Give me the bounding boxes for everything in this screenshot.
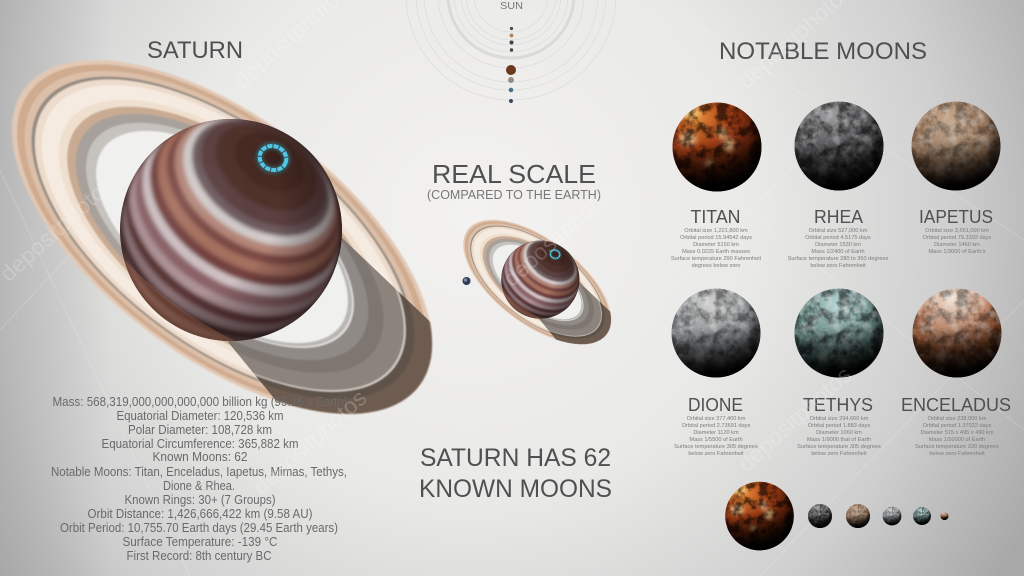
moon: dione: below zero Fahrenheit — [688, 451, 744, 457]
moon: enceladus: below zero Fahrenheit — [929, 451, 985, 457]
moon: dione: Orbital size 377,400 km — [687, 416, 746, 422]
moon: dione: Orbital period 2.73691 days — [682, 423, 751, 429]
heading: real scale — [427, 159, 601, 202]
moon: rhea: Diameter 1530 km — [815, 242, 861, 248]
moon: rhea: Orbital size 527,000 km — [809, 228, 868, 234]
moon: titan: Orbital size 1,221,800 km — [684, 228, 748, 234]
moon: enceladus — [901, 288, 1011, 457]
moon: tethys: below zero Fahrenheit — [811, 451, 867, 457]
moon: tethys: Orbital period 1.883 days — [808, 423, 870, 429]
moon: enceladus: ENCELADUS — [901, 394, 1011, 415]
saturn facts list: Mass: 568,319,000,000,000,000 billion kg (95.16 x Earth) — [52, 395, 348, 409]
moon: enceladus: Diameter 515 x 495 x 490 km — [920, 430, 994, 436]
heading: real scale: (COMPARED TO THE EARTH) — [427, 188, 601, 202]
saturn facts list: Equatorial Diameter: 120,536 km — [116, 409, 284, 423]
moon: titan: TITAN — [690, 206, 740, 227]
stock watermarks — [0, 0, 857, 500]
moon: rhea: Mass 1/2400 of Earth — [811, 249, 865, 255]
solar system orbit diagram — [406, 0, 616, 103]
saturn facts list: Dione & Rhea. — [163, 479, 235, 493]
moon: titan — [671, 102, 762, 269]
moon: iapetus: Diameter 1460 km — [934, 242, 980, 248]
moon: iapetus: IAPETUS — [919, 206, 993, 227]
stock watermarks: depositphotos — [733, 361, 857, 477]
moon: tethys: Surface temperature 305 degrees — [797, 444, 881, 450]
moon: tethys: Mass 1/9000 that of Earth — [807, 437, 871, 443]
saturn facts list: Known Rings: 30+ (7 Groups) — [124, 493, 276, 507]
moon: dione: Surface temperature 305 degrees — [674, 444, 758, 450]
real scale saturn and earth — [442, 196, 632, 368]
moon: iapetus: Orbital period 79.3302 days — [923, 235, 992, 241]
moons size comparison row — [725, 481, 949, 551]
moon: enceladus: Mass 1/50000 of Earth — [929, 437, 985, 443]
stock watermarks: depositphotos — [248, 384, 372, 500]
moon: titan: Surface temperature 290 Fahrenheit — [671, 256, 762, 262]
statement: saturn has 62 known moons — [419, 444, 612, 503]
moon: iapetus: Mass 1/3000 of Earth's — [928, 249, 986, 255]
saturn facts list: Orbit Period: 10,755.70 Earth days (29.45 Earth years) — [60, 521, 338, 535]
moon: iapetus — [911, 101, 1001, 255]
moon: titan: Orbital period 15.94542 days — [680, 235, 752, 241]
moon: rhea — [788, 101, 889, 269]
moon: tethys: Diameter 1060 km — [816, 430, 862, 436]
inner and outer planets — [506, 27, 516, 103]
moon: tethys — [794, 288, 884, 457]
moon: rhea: below zero Fahrenheit — [810, 263, 866, 269]
moon: dione: Diameter 1120 km — [693, 430, 739, 436]
moon: rhea: RHEA — [814, 206, 864, 227]
title: saturn: SATURN — [147, 37, 243, 64]
moon: enceladus: Orbital period 1.37022 days — [923, 423, 992, 429]
moon: tethys: Orbital size 294,660 km — [810, 416, 869, 422]
moon: tethys: TETHYS — [803, 394, 873, 415]
saturn facts list: Equatorial Circumference: 365,882 km — [102, 437, 298, 451]
heading: notable moons: NOTABLE MOONS — [719, 38, 927, 65]
moon: rhea: Surface temperature 280 to 360 degrees — [788, 256, 889, 262]
saturn facts list: Orbit Distance: 1,426,666,422 km (9.58 AU) — [88, 507, 312, 521]
moon: iapetus: Orbital size 3,561,000 km — [925, 228, 989, 234]
saturn facts list: Notable Moons: Titan, Enceladus, Iapetus, Mimas, Tethys, — [51, 465, 347, 479]
statement: saturn has 62 known moons: KNOWN MOONS — [419, 475, 612, 503]
moon: rhea: Orbital period 4.5175 days — [805, 235, 871, 241]
saturn facts list: Surface Temperature: -139 °C — [122, 535, 278, 549]
saturn facts list: Polar Diameter: 108,728 km — [128, 423, 272, 437]
moon: dione — [671, 288, 761, 457]
label: sun: SUN — [500, 0, 523, 12]
saturn large illustration — [0, 0, 491, 481]
saturn facts list — [51, 395, 348, 563]
stock watermarks: depositphotos — [498, 176, 622, 292]
moon: titan: degrees below zero — [692, 263, 740, 269]
moon: titan: Mass 0.0225 Earth masses — [682, 249, 750, 255]
saturn facts list: Known Moons: 62 — [152, 450, 248, 464]
moon: dione: DIONE — [688, 394, 743, 415]
moon: titan: Diameter 5150 km — [693, 242, 739, 248]
moon: dione: Mass 1/5500 of Earth — [689, 437, 743, 443]
moon: enceladus: Orbital size 238,000 km — [928, 416, 987, 422]
saturn facts list: First Record: 8th century BC — [126, 549, 272, 563]
moon: enceladus: Surface temperature 330 degrees — [915, 444, 999, 450]
heading: real scale: REAL SCALE — [432, 159, 596, 189]
statement: saturn has 62 known moons: SATURN HAS 62 — [420, 444, 611, 472]
